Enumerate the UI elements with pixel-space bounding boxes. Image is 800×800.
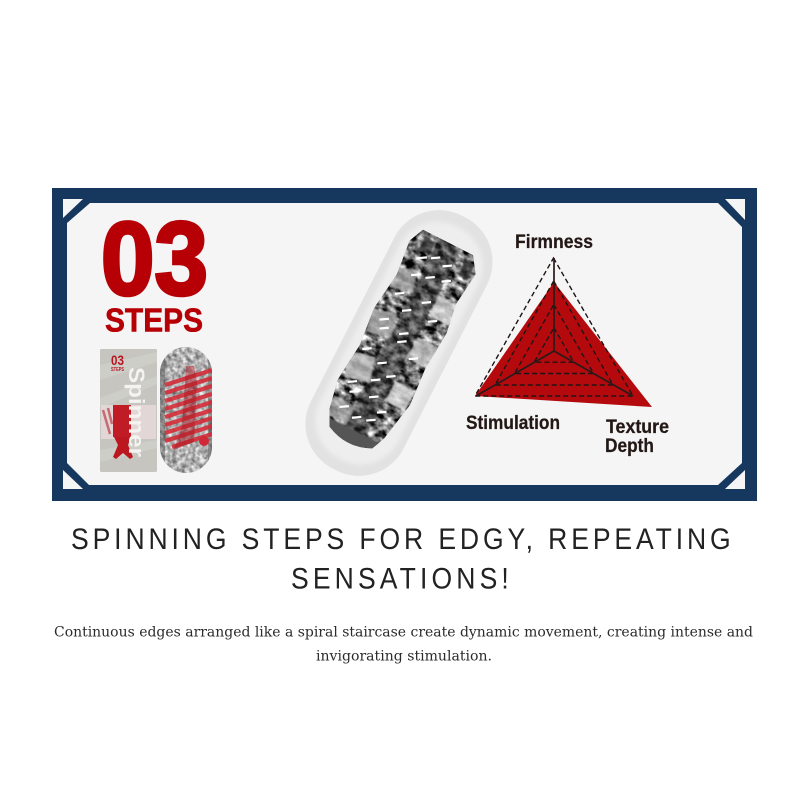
chart labels: [466, 232, 669, 457]
label: Firmness: Firmness: [515, 232, 593, 253]
title: SPINNING STEPS FOR EDGY, REPEATING: [71, 523, 731, 555]
dashed outer and nested triangles: [475, 258, 633, 396]
product: outer sleeve: STEPS: [111, 367, 125, 373]
heading: 03 STEPS: [101, 202, 208, 338]
title: [71, 523, 731, 595]
capsule shell: [288, 193, 510, 493]
frame border: [52, 188, 757, 501]
panel background: [67, 203, 742, 485]
word STEPS: STEPS: [105, 302, 203, 338]
title: SENSATIONS!: [291, 562, 509, 595]
product: outer sleeve: [100, 349, 157, 472]
product: small silver capsule with red spiral: [160, 347, 212, 473]
corner: bottom left: [63, 470, 83, 489]
description text: [54, 624, 753, 664]
corner: top left: [63, 199, 83, 218]
description text: invigorating stimulation.: [316, 648, 492, 664]
red data area: [475, 282, 652, 407]
chart: radar triangle: [475, 258, 652, 407]
product: large textured capsule: [306, 210, 492, 476]
number 03: 03: [101, 202, 208, 318]
corner: bottom right: [725, 470, 745, 489]
sleeve brand name: Spinner: [124, 367, 149, 457]
label: Texture Depth: [605, 417, 669, 457]
label: Texture Depth: Depth: [605, 436, 654, 457]
label: Texture Depth: Texture: [606, 417, 669, 438]
description text: Continuous edges arranged like a spiral staircase create dynamic movement, creating intense and: [54, 624, 753, 640]
panel: navy framed product card: [52, 188, 757, 501]
sleeve label 03 STEPS: 03: [111, 352, 124, 368]
capsule texture: [330, 230, 476, 448]
solid axes: [476, 258, 633, 396]
label: Stimulation: Stimulation: [466, 413, 560, 434]
corner: top right: [725, 199, 745, 220]
